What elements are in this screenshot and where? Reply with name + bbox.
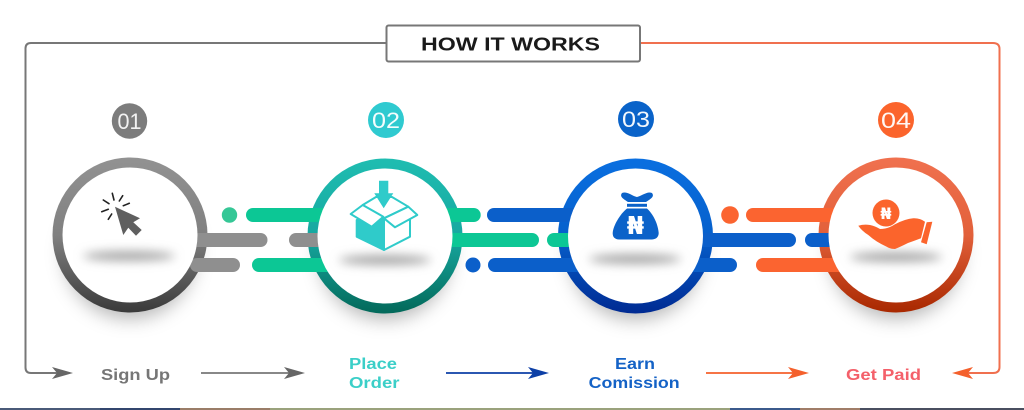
icon: hand holding naira coin: ₦ [880,204,892,223]
connector bars: orange [721,206,856,272]
outer rings [52,158,974,314]
step number 01: 01 [118,109,142,134]
bottom image strip [0,408,1024,410]
icon: box with down arrow [351,181,417,250]
white inner discs [62,168,964,304]
step number 04: 04 [881,108,911,133]
label: sign up: Sign Up [101,367,170,384]
frame: grey left connector [26,43,386,373]
title: HOW IT WORKS [421,34,600,54]
arrow: sign up to place order [201,367,305,379]
frame: orange right connector [640,43,1000,373]
label: place order: Place [349,356,397,373]
title box [386,26,640,62]
disc floor shadows [83,251,942,265]
icon: money bag with naira sign: ₦ [627,211,644,240]
label: place order: Order [349,375,400,392]
arrow: earn comission to get paid [706,367,809,379]
label: get paid: Get Paid [846,367,921,384]
step number 02 [368,102,404,138]
icon: mouse cursor [102,193,142,236]
icon: money bag with naira sign [613,193,659,240]
label: earn comission [589,356,680,392]
step number 03: 03 [622,107,650,132]
arrow: into sign up [52,367,73,379]
label: earn comission: Comission [589,375,680,392]
icon: hand holding naira coin [858,200,932,249]
ring drop shadows [64,187,962,320]
arrow: place order to earn comission [446,367,549,379]
connector bars: grey [190,233,339,272]
step number 02: 02 [372,108,400,133]
connector bars: green [222,207,597,272]
step number 03 [618,101,654,137]
connector bars: blue [466,208,855,272]
step number 01 [112,103,147,139]
label: earn comission: Earn [615,356,655,373]
step number 04 [878,102,914,138]
label: place order [349,356,400,392]
arrow: into get paid [952,367,973,379]
